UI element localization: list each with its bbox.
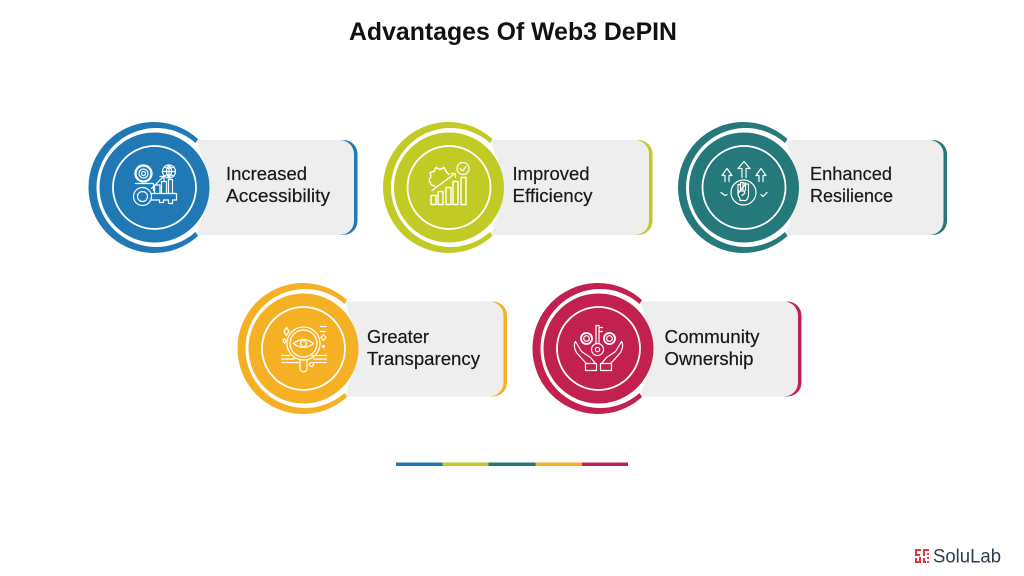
logo: SoluLab: SoluLab: [933, 546, 1001, 568]
label: [226, 163, 331, 206]
title: Advantages Of Web3 DePIN: [349, 18, 677, 46]
icon: gear, globe, chart and key: [134, 165, 176, 206]
panel: Enhanced Resilience: [678, 122, 947, 253]
label: [664, 326, 760, 369]
icon: hands, key and gears: [574, 326, 623, 370]
label: Increased: [226, 163, 307, 184]
label: Efficiency: [512, 185, 593, 206]
label: Accessibility: [226, 185, 331, 206]
label: Community: [664, 326, 760, 347]
label: [512, 163, 593, 206]
label: Enhanced: [810, 163, 892, 184]
icon: logo mark: [915, 549, 929, 563]
label: Resilience: [810, 185, 893, 206]
panel: Greater Transparency: [237, 283, 507, 414]
label: Greater: [367, 326, 429, 347]
label: Transparency: [367, 348, 481, 369]
panel: Community Ownership: [532, 283, 802, 414]
icon: magnifier with eye: [282, 326, 326, 372]
panel: Improved Efficiency: [383, 122, 652, 253]
panel: Increased Accessibility: [88, 122, 358, 253]
icon: raised fist and arrows: [721, 162, 767, 205]
label: [810, 163, 893, 206]
colour legend bar: [396, 462, 628, 466]
label: [367, 326, 481, 369]
label: Ownership: [664, 348, 754, 369]
icon: gear and rising bars: [429, 162, 469, 204]
label: Improved: [512, 163, 590, 184]
